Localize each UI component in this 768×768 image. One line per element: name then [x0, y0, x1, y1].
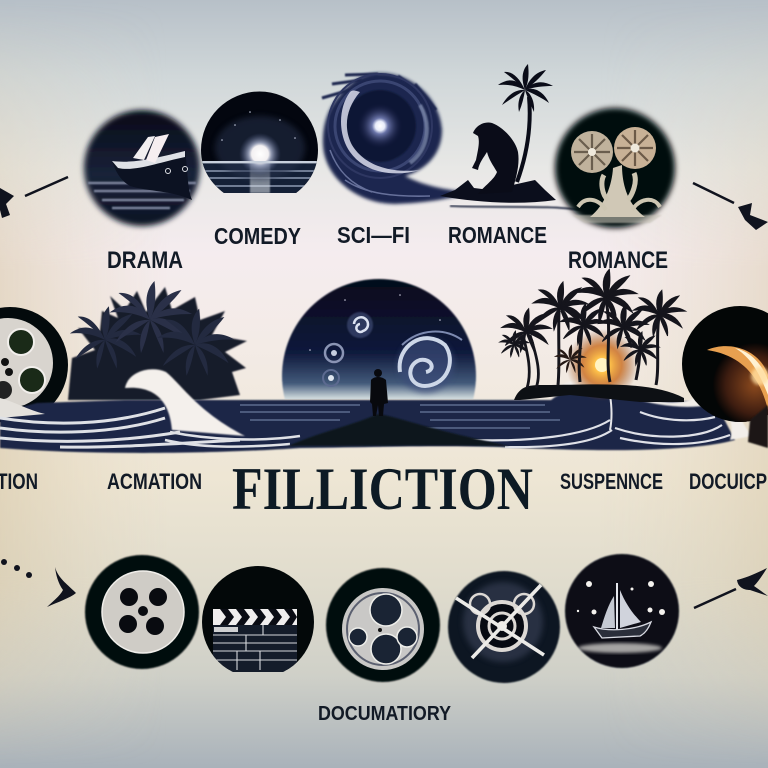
icon: film reel bottom 1 — [85, 555, 199, 669]
icon: comedy moon circle — [201, 92, 318, 193]
icon: bush left — [68, 281, 247, 400]
icon: sci-fi spiral wave — [322, 73, 470, 204]
icon: romance shells circle — [555, 108, 675, 228]
label: romance 1: ROMANCE — [448, 222, 547, 248]
arrow: lower left — [1, 559, 76, 607]
icon: drama boat circle — [84, 110, 200, 226]
label: sci-fi: SCI—FI — [337, 222, 410, 248]
icon: film reel left — [0, 307, 68, 423]
label: acmation: ACMATION — [107, 469, 202, 494]
label: romance 2: ROMANCE — [568, 247, 668, 274]
icon: central night sky — [280, 278, 478, 399]
title: FILLICTION — [232, 456, 533, 522]
arrow: lower right — [694, 568, 768, 608]
icon: documentary circle right — [680, 304, 768, 448]
icon: film reel bottom 2 — [326, 568, 440, 682]
label: drama: DRAMA — [107, 247, 183, 274]
chart: waves band — [0, 369, 752, 453]
icon: romance figure with palm — [440, 64, 580, 210]
label: comedy: COMEDY — [214, 223, 301, 249]
icon: clapperboard — [198, 565, 320, 672]
icon: sailboat circle — [565, 554, 679, 668]
arrow: top right — [693, 183, 768, 230]
icon: film reel crossed — [448, 571, 560, 683]
icon: lone figure — [370, 369, 388, 416]
label: suspense: SUSPENNCE — [560, 469, 663, 494]
label: documentary: DOCUMATIORY — [318, 703, 452, 725]
arrow: top left — [0, 177, 68, 218]
icon: palm trees right — [499, 269, 686, 402]
